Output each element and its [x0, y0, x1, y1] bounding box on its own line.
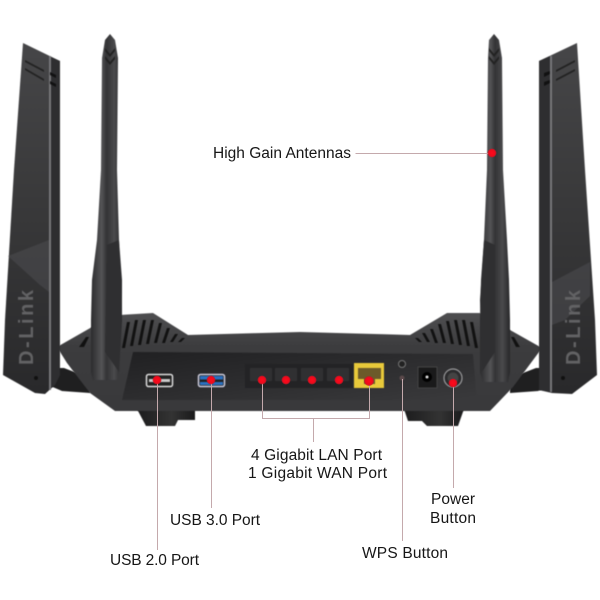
- left paddle antenna: [3, 43, 60, 394]
- label: power button: [430, 491, 476, 527]
- right vent: [415, 320, 520, 348]
- label: power button: Button: [430, 510, 476, 527]
- dc jack: [418, 367, 437, 388]
- label: wps button: WPS Button: [362, 545, 448, 562]
- router feet: [137, 409, 464, 426]
- label: lan and wan ports: [248, 447, 388, 482]
- label: usb 2.0: USB 2.0 Port: [110, 552, 200, 569]
- power button: [444, 369, 462, 387]
- right paddle antenna: [539, 43, 597, 394]
- right logo: D-Link: [563, 289, 585, 365]
- usb 2.0 port: [146, 374, 172, 386]
- router body: [57, 313, 542, 411]
- label: usb 3.0: USB 3.0 Port: [170, 512, 261, 529]
- left vent: [79, 320, 185, 348]
- right thin antenna: [480, 34, 510, 382]
- left logo: D-Link: [16, 289, 38, 365]
- callout markers: [152, 148, 496, 388]
- label: high gain antennas: High Gain Antennas: [213, 145, 351, 162]
- wan port: [354, 363, 384, 388]
- usb 3.0 port: [198, 374, 224, 386]
- right hinge: [510, 368, 552, 393]
- label: lan and wan ports: 1 Gigabit WAN Port: [248, 465, 388, 482]
- label: power button: Power: [431, 491, 475, 508]
- left hinge: [48, 368, 90, 393]
- rear panel: [122, 352, 477, 400]
- leader lines: [158, 154, 492, 550]
- wps button: [398, 360, 406, 380]
- left thin antenna: [91, 34, 122, 380]
- lan port block: [245, 364, 353, 388]
- label: lan and wan ports: 4 Gigabit LAN Port: [251, 447, 383, 464]
